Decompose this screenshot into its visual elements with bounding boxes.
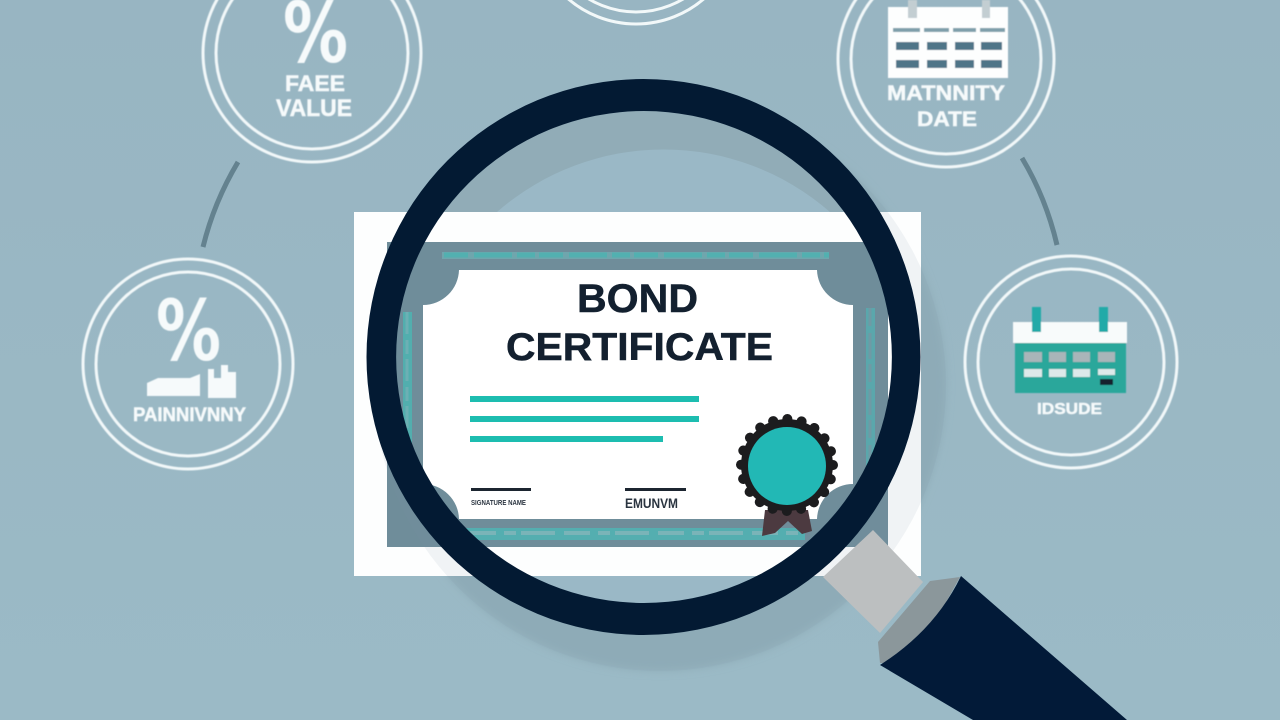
magnifier handle xyxy=(823,530,1127,720)
ornament strip: top xyxy=(442,252,829,259)
handle collar xyxy=(878,577,960,663)
label: maturity line 1: MATNNITY xyxy=(887,82,1005,105)
signature label right: EMUNVM xyxy=(625,495,678,511)
magnifier ring xyxy=(366,79,920,635)
badge: payment xyxy=(83,259,293,469)
certificate title line 2: CERTIFICATE xyxy=(506,326,773,369)
icon: calendar white xyxy=(888,0,1008,78)
certificate border xyxy=(387,242,888,547)
connector arc: right xyxy=(1022,158,1057,245)
ornament strip: bottom xyxy=(465,528,805,540)
shadow falling on certificate xyxy=(380,212,921,576)
lens cast shadow xyxy=(374,99,946,671)
bond certificate xyxy=(354,212,921,576)
teal text lines xyxy=(470,396,699,442)
icon: calendar teal xyxy=(1013,307,1127,393)
handle grip xyxy=(880,576,1127,720)
signature line right xyxy=(625,488,686,491)
label: face value line 2: VALUE xyxy=(276,95,352,122)
ornament strip: right xyxy=(866,308,875,480)
badge: face value xyxy=(203,0,421,162)
badge: top centre (cropped) xyxy=(532,0,740,24)
certificate inner panel xyxy=(423,270,853,519)
badge: issue date xyxy=(965,256,1177,468)
label: payment: PAINNIVNNY xyxy=(133,405,246,426)
signature label left: SIGNATURE NAME xyxy=(471,500,526,507)
label: issue: IDSUDE xyxy=(1037,401,1102,418)
certificate title line 1: BOND xyxy=(577,277,698,321)
certificate paper xyxy=(354,212,921,576)
seal ribbon xyxy=(762,510,812,536)
handle neck xyxy=(823,530,923,633)
ornament strip: left xyxy=(403,312,412,482)
label: maturity line 2: DATE xyxy=(917,108,977,131)
seal xyxy=(741,419,833,511)
lens interior background xyxy=(382,95,906,619)
icon: percent: % xyxy=(156,282,221,380)
badge: maturity date xyxy=(838,0,1054,167)
signature line left xyxy=(471,488,531,491)
lens interior top shade xyxy=(400,91,890,260)
label: face value line 1: FAEE xyxy=(285,71,345,96)
icon: factory blocks xyxy=(147,365,236,398)
connector arc: left xyxy=(203,162,238,247)
